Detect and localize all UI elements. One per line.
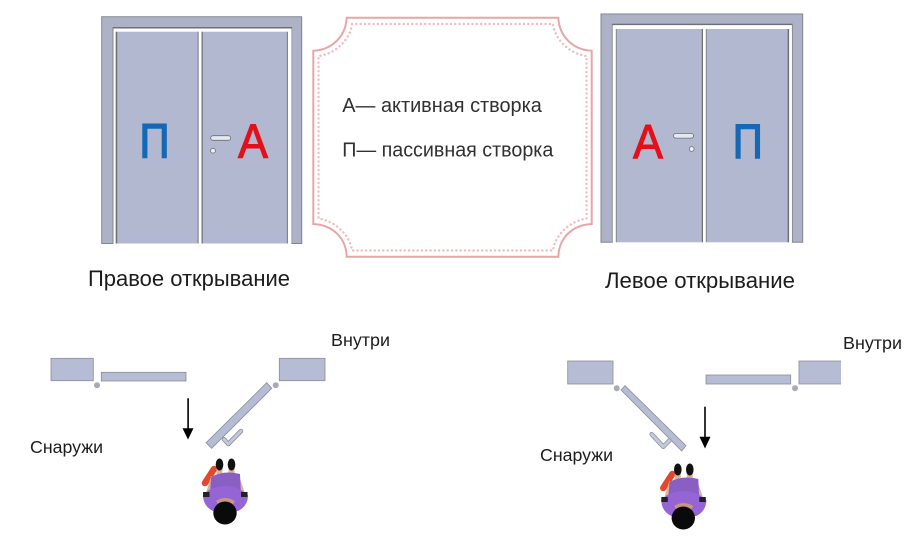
hinge right <box>273 382 279 388</box>
plan handle <box>652 434 669 447</box>
keyhole <box>689 147 694 151</box>
closed passive leaf <box>101 372 186 381</box>
dotted inner border <box>318 24 586 250</box>
arrow <box>182 398 194 440</box>
panel: legend card <box>313 18 592 257</box>
letter: passive leaf: П <box>140 116 170 168</box>
hinge left <box>94 382 100 388</box>
label: outside: Снаружи <box>540 445 613 465</box>
active leaf <box>202 32 287 244</box>
closed passive leaf <box>706 375 791 384</box>
plan diagram: left-hand opening <box>568 361 841 451</box>
panel: right double door, left-hand opening <box>601 14 803 242</box>
keyhole <box>211 148 215 153</box>
icon: person, left plan <box>203 458 248 524</box>
hinge right <box>792 385 798 391</box>
label: left-hand opening: Левое открывание <box>605 268 795 293</box>
panel: left double door, right-hand opening <box>102 17 302 244</box>
label: inside: Внутри <box>331 330 390 350</box>
arrow <box>700 407 710 448</box>
label: outside: Снаружи <box>30 437 103 457</box>
plan handle <box>224 431 241 444</box>
door frame <box>102 17 302 244</box>
legend: passive leaf: П— пассивная створка <box>342 140 554 162</box>
wall right <box>799 361 841 384</box>
active leaf <box>616 29 702 242</box>
wall left <box>51 358 93 381</box>
legend: active leaf: А— активная створка <box>342 95 543 117</box>
letter: passive leaf: П <box>733 116 763 169</box>
door frame <box>601 14 803 242</box>
door handle <box>674 134 694 138</box>
hinge left <box>614 385 620 391</box>
wall left <box>568 361 613 384</box>
open active leaf <box>206 383 272 448</box>
plan diagram: right-hand opening <box>51 358 325 448</box>
label: right-hand opening: Правое открывание <box>88 266 290 291</box>
letter: active leaf: А <box>238 116 268 168</box>
letter: active leaf: А <box>633 116 663 169</box>
label: inside: Внутри <box>843 333 902 353</box>
wall right <box>279 358 325 381</box>
passive leaf <box>706 29 788 242</box>
passive leaf <box>117 32 198 244</box>
card border <box>313 18 592 257</box>
door handle <box>211 136 231 140</box>
icon: person, right plan <box>661 464 706 530</box>
open active leaf <box>621 386 686 451</box>
